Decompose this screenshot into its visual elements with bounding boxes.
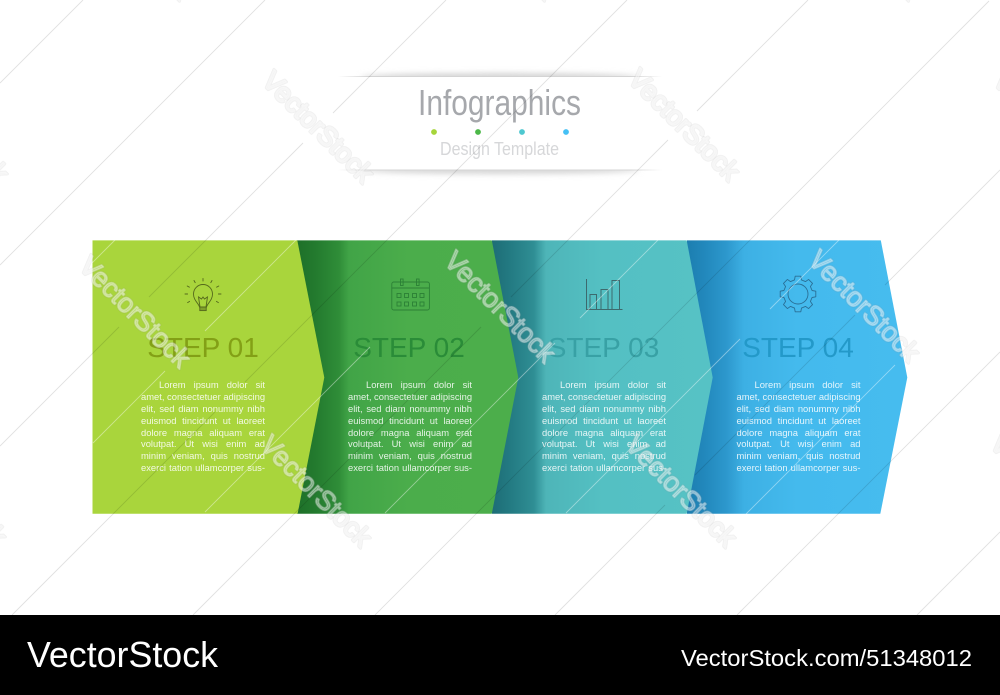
body text: elit, sed diam nonummy nibh	[141, 403, 265, 414]
body text: elit, sed diam nonummy nibh	[736, 403, 860, 414]
subheading: Design Template	[440, 139, 559, 159]
icon: light bulb	[184, 278, 222, 312]
watermark overlay: VectorStock	[256, 65, 380, 189]
panel shape	[492, 240, 713, 514]
body text	[141, 379, 265, 473]
body text: euismod tincidunt ut laoreet	[348, 415, 472, 426]
body text: Lorem ipsum dolor sit	[560, 379, 666, 390]
watermark overlay: VectorStock	[619, 429, 743, 553]
body text: euismod tincidunt ut laoreet	[542, 415, 666, 426]
body text: exerci tation ullamcorper sus-	[141, 462, 265, 473]
watermark overlay: VectorStock	[619, 429, 743, 553]
heading: step 02: STEP 02	[353, 332, 465, 362]
watermark overlay: VectorStock	[254, 429, 378, 553]
bottom shadow edge	[344, 170, 656, 176]
watermark overlay: VectorStock	[802, 244, 926, 368]
body text: elit, sed diam nonummy nibh	[542, 403, 666, 414]
heading: step 04: STEP 04	[742, 332, 854, 362]
body text: euismod tincidunt ut laoreet	[736, 415, 860, 426]
heading: step 03: STEP 03	[548, 332, 659, 362]
body text: minim veniam, quis nostrud	[542, 450, 666, 461]
body text: exerci tation ullamcorper sus-	[348, 462, 472, 473]
watermark overlay: VectorStock	[622, 63, 746, 187]
body text: euismod tincidunt ut laoreet	[141, 415, 265, 426]
body text	[348, 379, 472, 473]
watermark overlay: VectorStock	[438, 245, 562, 369]
body text: amet, consectetuer adipiscing	[542, 391, 666, 402]
body text: exerci tation ullamcorper sus-	[736, 462, 860, 473]
body text: amet, consectetuer adipiscing	[736, 391, 861, 402]
body text: dolore magna aliquam erat	[348, 427, 472, 438]
icon: calendar	[391, 278, 430, 310]
watermark overlay: VectorStock	[802, 244, 926, 368]
body text: volutpat. Ut wisi enim ad	[141, 438, 265, 449]
panel: step 04	[687, 240, 908, 514]
body text: Lorem ipsum dolor sit	[159, 379, 265, 390]
heading: Infographics	[418, 82, 581, 123]
colour dots	[431, 129, 569, 135]
body text: Lorem ipsum dolor sit	[366, 379, 472, 390]
body text: minim veniam, quis nostrud	[348, 450, 472, 461]
icon: bar chart	[586, 279, 622, 310]
body text: amet, consectetuer adipiscing	[141, 391, 265, 402]
watermark overlay: VectorStock	[73, 250, 197, 374]
body text: volutpat. Ut wisi enim ad	[348, 438, 472, 449]
body text: dolore magna aliquam erat	[736, 427, 860, 438]
body text: minim veniam, quis nostrud	[141, 450, 265, 461]
footer band: VectorStock.com/51348012	[681, 645, 972, 671]
watermark overlay: VectorStock	[73, 250, 197, 374]
panel shape	[92, 240, 324, 514]
panel shape	[297, 240, 518, 514]
panel: step 02	[297, 240, 518, 514]
body text: exerci tation ullamcorper sus-	[542, 462, 666, 473]
body text: dolore magna aliquam erat	[141, 427, 265, 438]
top shadow edge	[344, 70, 656, 77]
body text: volutpat. Ut wisi enim ad	[542, 438, 666, 449]
body text: minim veniam, quis nostrud	[736, 450, 860, 461]
panel: step 03	[492, 240, 713, 514]
watermark overlay: VectorStock	[622, 63, 746, 187]
body text: amet, consectetuer adipiscing	[348, 391, 472, 402]
heading: step 01: STEP 01	[147, 332, 259, 362]
panel shape	[687, 240, 908, 514]
body text: dolore magna aliquam erat	[542, 427, 666, 438]
footer band: VectorStock	[27, 634, 219, 675]
watermark overlay: VectorStock	[256, 65, 380, 189]
title block	[344, 70, 656, 176]
watermark overlay: VectorStock	[254, 429, 378, 553]
body text	[542, 379, 666, 473]
body text: volutpat. Ut wisi enim ad	[736, 438, 860, 449]
watermark overlay: VectorStock	[438, 245, 562, 369]
body text	[736, 379, 861, 473]
body text: elit, sed diam nonummy nibh	[348, 403, 472, 414]
panel: step 01	[92, 240, 324, 514]
icon: gear	[780, 276, 816, 312]
body text: Lorem ipsum dolor sit	[754, 379, 860, 390]
